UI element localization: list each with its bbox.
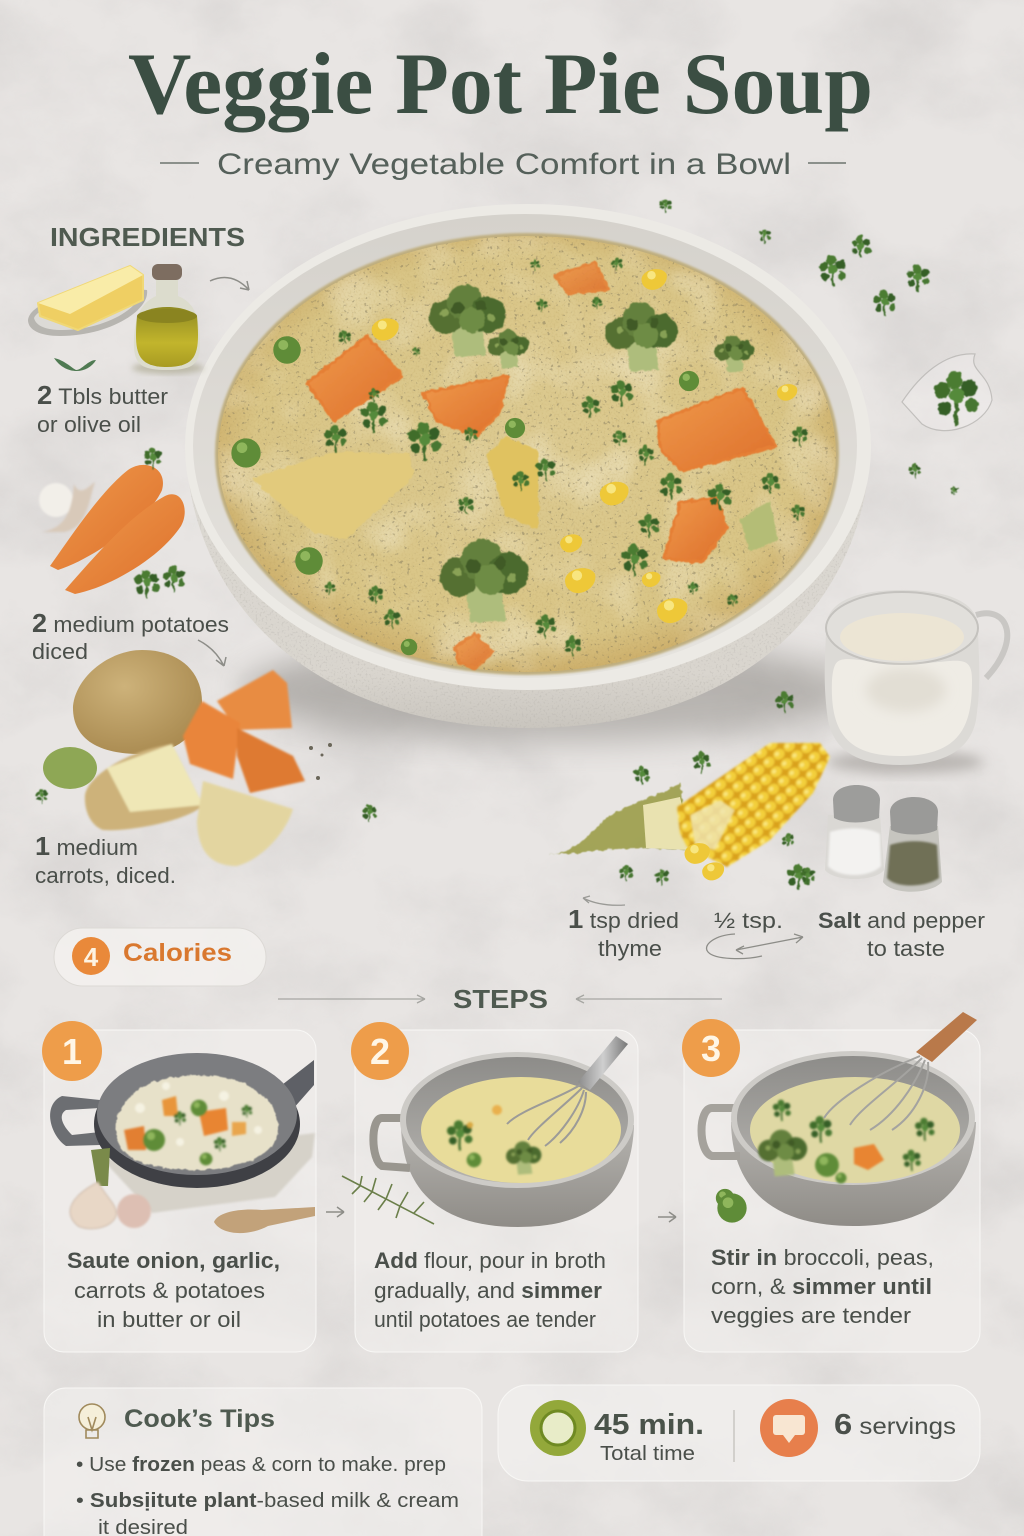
corn [372, 269, 797, 623]
icon: diced orange cubes [183, 670, 305, 793]
ingredient text: half teaspoon: ½ tsp. [714, 908, 783, 933]
ingredient: carrots and garlic [39, 448, 185, 600]
calories badge [54, 928, 266, 986]
icon: garlic [39, 482, 95, 532]
heading: steps: STEPS [453, 984, 548, 1014]
arrow [210, 278, 249, 290]
ingredient: butter and olive oil [28, 264, 249, 437]
total time value: Total time [600, 1443, 695, 1465]
icon: carrot [50, 465, 163, 570]
ingredient text: thyme: thyme [598, 936, 662, 961]
calories badge: Calories [123, 939, 232, 967]
carrot pieces [307, 262, 776, 669]
icon: glass dish with parsley [902, 354, 992, 431]
broccoli [429, 285, 753, 623]
servings value: 6 servings [834, 1409, 956, 1441]
heading: ingredients: INGREDIENTS [50, 222, 245, 252]
icon: salt and pepper shakers [825, 785, 942, 892]
step text [711, 1245, 934, 1328]
badge: 3 [682, 1019, 740, 1077]
step text: Saute onion, garlic, [67, 1248, 280, 1273]
title: Veggie Pot Pie Soup [128, 36, 873, 133]
step text: in butter or oil [97, 1307, 241, 1332]
ingredient text [37, 380, 168, 437]
icon: butter dish [28, 266, 147, 336]
ingredient text: salt and pepper [818, 908, 985, 961]
icon: whole potato [73, 650, 202, 754]
panel: cook's tips [44, 1388, 482, 1536]
icon: cream jar [825, 590, 1007, 774]
badge: 2: 2 [370, 1031, 390, 1072]
ingredient text: salt and pepper: Salt and pepper [818, 908, 985, 933]
heading: steps [278, 984, 722, 1014]
bowl of soup [180, 204, 880, 742]
step text: carrots & potatoes [74, 1278, 265, 1303]
icon: carrot [65, 494, 185, 594]
icon: timer [530, 1400, 586, 1456]
subtitle: Creamy Vegetable Comfort in a Bowl [217, 148, 791, 181]
icon: servings [760, 1399, 818, 1457]
ingredient: potatoes [32, 608, 377, 866]
icon: rosemary sprig [342, 1176, 434, 1224]
step text: Stir in broccoli, peas, [711, 1245, 934, 1270]
icon: herb sprig [54, 358, 96, 371]
ingredient text: thyme: 1 tsp dried [568, 904, 679, 934]
ingredient text: 2 Tbls butter [37, 380, 168, 410]
icon: whisk [507, 1036, 628, 1146]
step text: corn, & simmer until [711, 1274, 932, 1299]
total time value [594, 1409, 704, 1465]
ingredient text: carrots [35, 831, 176, 888]
ingredient text: salt and pepper: to taste [867, 936, 945, 961]
tips heading: Cook’s Tips [124, 1405, 275, 1433]
arrow: thyme [583, 896, 625, 905]
total time value: 45 min. [594, 1409, 704, 1441]
ingredient text: or olive oil [37, 412, 141, 437]
icon: whisk with wooden handle [824, 1012, 977, 1130]
panel: time and servings [498, 1385, 980, 1481]
ingredient text [32, 608, 229, 664]
step text: veggies are tender [711, 1303, 911, 1328]
ingredient text: half teaspoon [707, 908, 803, 959]
badge: 1 [42, 1021, 102, 1081]
ingredient text: 2 medium potatoes [32, 608, 229, 638]
garnish: scattered parsley right of bowl [660, 199, 958, 495]
tip 1: • Use frozen peas & corn to make. prep [76, 1454, 446, 1476]
peas [231, 336, 699, 655]
ingredient text: carrots: carrots, diced. [35, 863, 176, 888]
illustration: pot with whisk [342, 1036, 634, 1227]
ingredient text: thyme [568, 904, 679, 961]
arrow: step 2 to 3 [658, 1212, 676, 1222]
potato pieces [254, 438, 778, 552]
step text: Add flour, pour in broth [374, 1248, 606, 1273]
illustration: skillet with vegetables [50, 1053, 315, 1233]
icon: oil bottle [132, 264, 204, 374]
ingredient text: diced [32, 639, 88, 664]
step text [374, 1248, 606, 1332]
icon: number circle [72, 937, 110, 975]
arrow: step 1 to 2 [326, 1207, 344, 1217]
step text: until potatoes ae tender [374, 1307, 596, 1332]
badge: 1: 1 [62, 1031, 82, 1072]
icon: light bulb [79, 1404, 105, 1438]
soup surface [218, 236, 836, 672]
icon: herbs [134, 448, 185, 600]
icon: broad pea [43, 747, 97, 789]
icon: number circle: 4 [84, 942, 99, 972]
arrow [198, 640, 226, 666]
ingredient text: carrots: 1 medium [35, 831, 138, 861]
step text: gradually, and simmer [374, 1278, 602, 1303]
panel: step 3 [682, 1012, 980, 1352]
tip 2: • Subsịitute plant -based milk & cream [76, 1490, 459, 1512]
icon: wooden spoon [214, 1207, 315, 1233]
illustration: pot with vegetables and whisk [702, 1012, 977, 1226]
panel: step 2 [342, 1022, 638, 1352]
icon: potato chunks [85, 744, 293, 866]
badge: 2 [351, 1022, 409, 1080]
herbs on soup [324, 258, 808, 656]
step text [67, 1248, 280, 1332]
garnish: herbs around the corn [619, 692, 815, 891]
panel: step 1 [42, 1021, 316, 1352]
icon: corn cob [548, 743, 830, 880]
badge: 3: 3 [701, 1028, 721, 1069]
icon: garlic [70, 1182, 151, 1229]
